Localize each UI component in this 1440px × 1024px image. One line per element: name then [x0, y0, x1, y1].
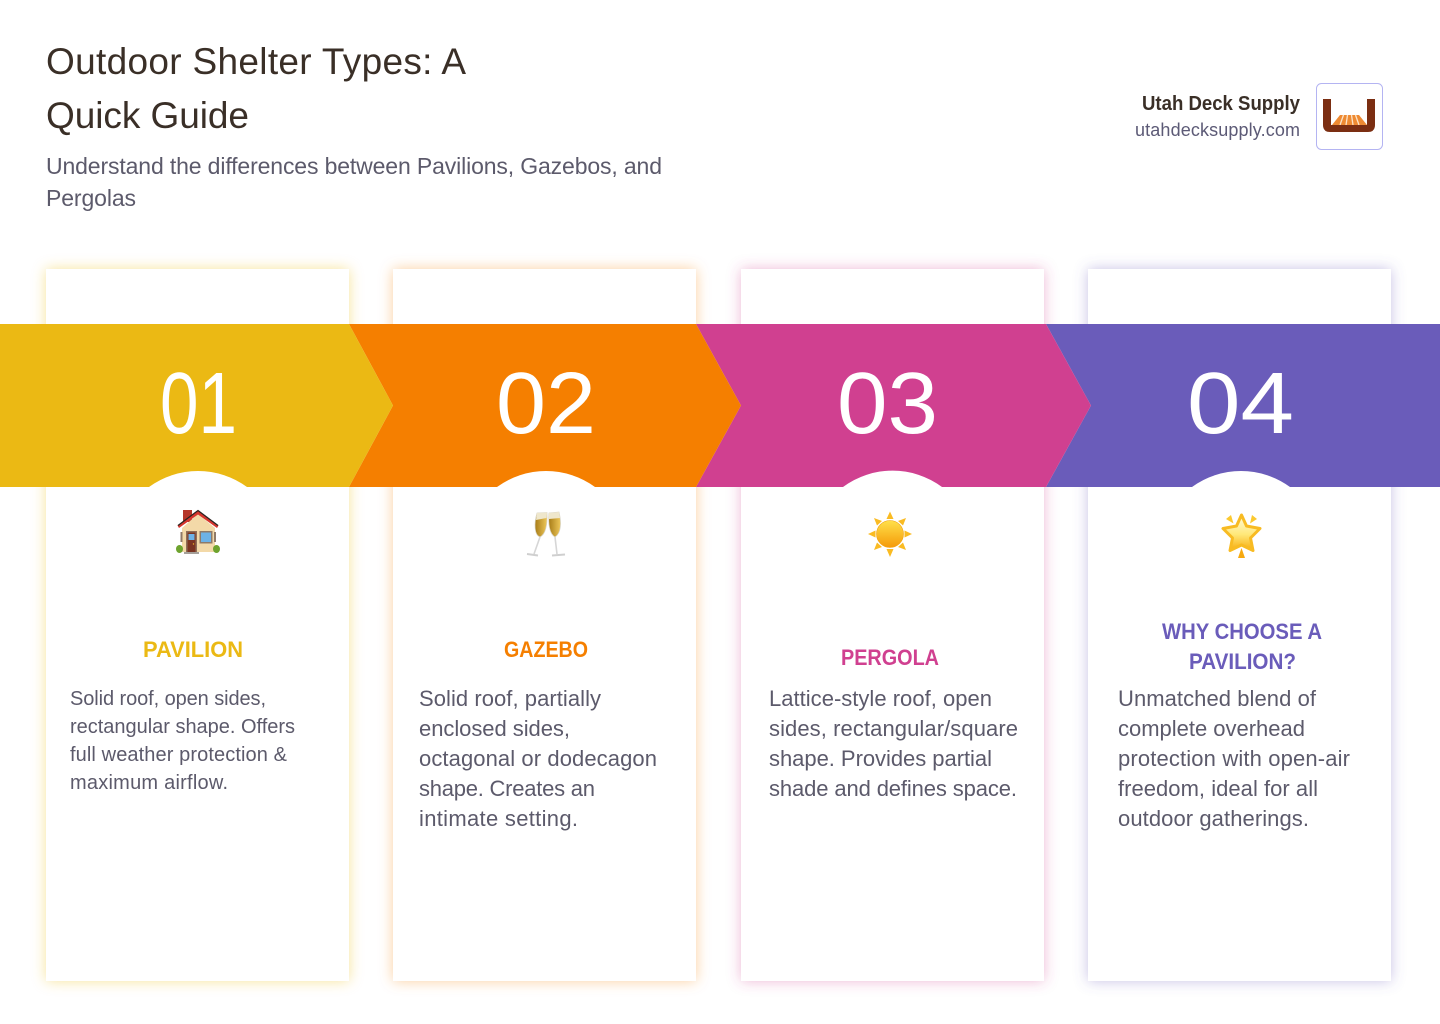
text: pergola description: shade and defines space.	[769, 776, 1017, 801]
subtitle: Pergolas	[46, 185, 136, 211]
text: why choose description	[1118, 686, 1350, 831]
panel: gazebo	[393, 269, 696, 981]
title: Outdoor Shelter Types: A	[46, 41, 466, 82]
text: pavilion description: Solid roof, open sides,	[70, 688, 266, 710]
text: pergola description: shape. Provides partial	[769, 746, 992, 771]
heading: pergola: PERGOLA	[841, 645, 939, 670]
text: gazebo description	[419, 686, 657, 831]
brand name and website	[1135, 93, 1301, 140]
icon: glowing star	[1223, 515, 1260, 558]
brand name and website: utahdecksupply.com	[1135, 120, 1300, 140]
arrow: step 01: 01	[160, 355, 237, 452]
text: why choose description: freedom, ideal for all	[1118, 776, 1318, 801]
panel: pavilion	[46, 269, 349, 981]
subtitle	[46, 153, 662, 211]
title: Quick Guide	[46, 95, 249, 136]
text: gazebo description: octagonal or dodecagon	[419, 746, 657, 771]
heading: gazebo: GAZEBO	[504, 637, 588, 662]
title	[46, 41, 466, 136]
icon: champagne glasses	[527, 512, 565, 556]
heading: why choose a pavilion: PAVILION?	[1189, 649, 1296, 674]
text: gazebo description: shape. Creates an	[419, 776, 595, 801]
icon: sun	[868, 512, 912, 557]
text: pergola description	[769, 686, 1018, 801]
arrow: step 03	[696, 324, 1091, 487]
text: why choose description: protection with open-air	[1118, 746, 1350, 771]
text: pavilion description: full weather protection &	[70, 744, 288, 766]
arrow: step 02	[349, 324, 741, 487]
text: pavilion description: rectangular shape. Offers	[70, 716, 295, 738]
text: why choose description: outdoor gatherings.	[1118, 806, 1309, 831]
text: pavilion description	[70, 688, 295, 794]
icon: brand logo	[1316, 84, 1382, 150]
heading: pavilion: PAVILION	[143, 637, 243, 662]
heading: why choose a pavilion: WHY CHOOSE A	[1162, 619, 1322, 644]
text: gazebo description: intimate setting.	[419, 806, 578, 831]
icon: house	[176, 510, 220, 554]
heading: why choose a pavilion	[1162, 619, 1322, 674]
text: pergola description: sides, rectangular/square	[769, 716, 1018, 741]
arrow: step 04: 04	[1187, 355, 1294, 452]
text: why choose description: complete overhead	[1118, 716, 1305, 741]
arrow: step 04	[1046, 324, 1440, 487]
arrow: step 02: 02	[496, 355, 596, 452]
subtitle: Understand the differences between Pavilions, Gazebos, and	[46, 153, 662, 179]
panel: why choose a pavilion	[1088, 269, 1391, 981]
panel: pergola	[741, 269, 1044, 981]
text: why choose description: Unmatched blend of	[1118, 686, 1317, 711]
text: pavilion description: maximum airflow.	[70, 772, 228, 794]
text: pergola description: Lattice-style roof, open	[769, 686, 992, 711]
text: gazebo description: enclosed sides,	[419, 716, 570, 741]
arrow: step 03: 03	[837, 355, 938, 452]
brand name and website: Utah Deck Supply	[1142, 93, 1301, 115]
text: gazebo description: Solid roof, partially	[419, 686, 601, 711]
arrow: step 01	[0, 324, 393, 487]
